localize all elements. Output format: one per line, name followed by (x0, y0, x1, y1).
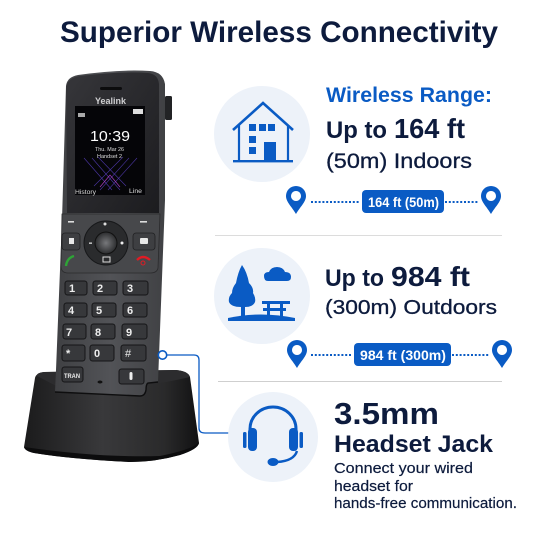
panel: outdoor range (214, 248, 512, 368)
text: up to 984 ft: Up to (325, 265, 384, 292)
screen: Line (129, 189, 143, 195)
title: Superior Wireless Connectivity (60, 16, 498, 49)
keypad (62, 281, 148, 384)
keypad labels: 9 (126, 327, 132, 339)
keypad labels: # (125, 348, 132, 360)
keypad labels: 0 (94, 348, 100, 360)
text: up to 984 ft (325, 261, 470, 292)
keypad labels: 4 (68, 305, 75, 317)
charging base (24, 370, 199, 462)
handset top bezel (66, 72, 159, 213)
speaker slot (100, 87, 122, 90)
description: headset for (334, 478, 413, 495)
description: hands-free communication. (334, 495, 517, 512)
leader line: headset jack to icon (158, 351, 229, 433)
keypad labels: 8 (95, 327, 101, 339)
keypad labels: * (66, 348, 71, 360)
distance bar: 164 ft (286, 186, 501, 214)
screen: History (75, 190, 96, 196)
keypad labels: 7 (66, 327, 72, 339)
text: up to 984 ft: 984 ft (391, 261, 470, 292)
navigation panel (61, 214, 160, 273)
icon: house (214, 86, 310, 182)
keypad labels: TRAN (64, 373, 80, 380)
description (334, 460, 517, 512)
text: 50m indoors: (50m) Indoors (326, 150, 472, 173)
screen: 10:39 (90, 128, 130, 145)
text: up to 164 ft: 164 ft (394, 113, 465, 144)
heading: 3.5mm: 3.5mm (334, 396, 439, 431)
panel: headset jack (228, 392, 517, 512)
keypad labels: 1 (69, 283, 75, 295)
distance bar: 164 ft: 164 ft (50m) (368, 195, 439, 210)
keypad labels: 5 (96, 305, 102, 317)
icon: headset (228, 392, 318, 482)
screen: Handset 2 (97, 154, 122, 160)
keypad labels: 6 (127, 305, 133, 317)
phone on charging base (24, 70, 199, 462)
keypad labels: 2 (97, 283, 103, 295)
keypad labels (64, 283, 133, 384)
side button (165, 96, 172, 120)
distance bar: 984 ft (287, 340, 512, 368)
text: up to 164 ft (326, 113, 465, 144)
text: up to 164 ft: Up to (326, 117, 387, 144)
screen (75, 106, 145, 196)
panel: indoor range (214, 84, 501, 214)
divider (218, 381, 502, 382)
divider (215, 235, 502, 236)
keypad labels: 3 (127, 283, 133, 295)
text: 300m outdoors: (300m) Outdoors (325, 297, 497, 319)
handset body (55, 70, 165, 396)
distance bar: 984 ft: 984 ft (300m) (360, 348, 446, 363)
description: Connect your wired (334, 460, 473, 477)
icon: tree and bench (214, 248, 310, 344)
heading: wireless range: Wireless Range: (326, 84, 492, 107)
screen: Thu. Mar 26 (95, 147, 124, 153)
heading: headset jack: Headset Jack (334, 431, 494, 458)
brand: Yealink (95, 96, 127, 106)
